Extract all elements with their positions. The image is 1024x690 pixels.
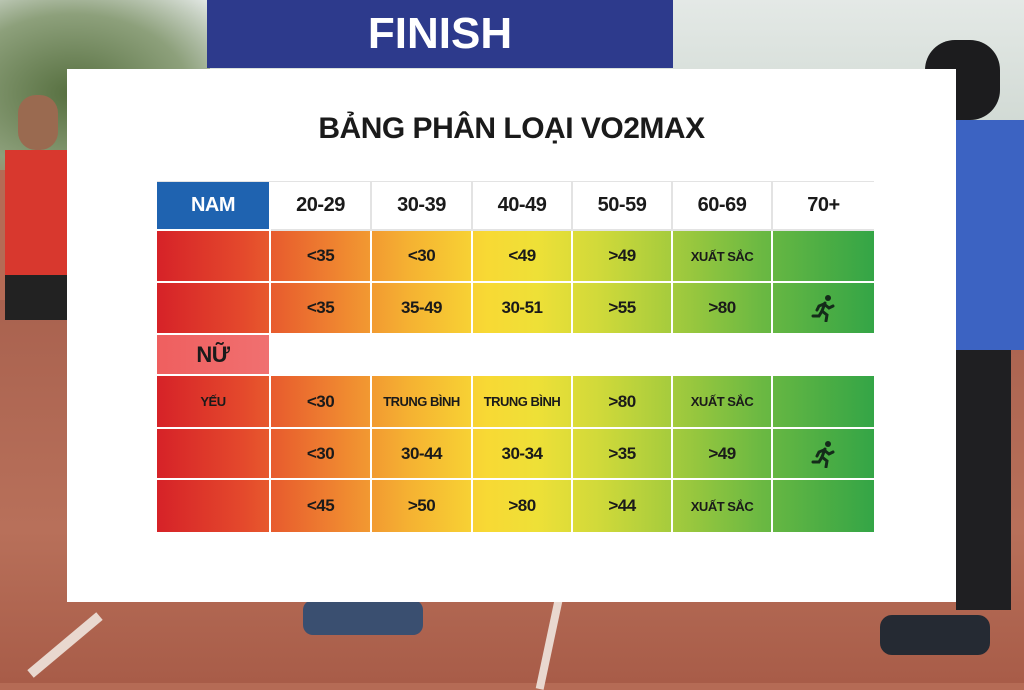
person right [956, 120, 1024, 350]
banner: finish: FINISH [368, 9, 512, 58]
header row: 30-39 [397, 194, 446, 216]
female header: NỮ [196, 342, 230, 366]
female row 3: >80 [508, 496, 536, 515]
male row 2: >55 [608, 298, 636, 317]
male row 1 [157, 231, 874, 283]
female row 2: >35 [608, 444, 636, 462]
female row 2 [157, 429, 874, 480]
female row 1: XUẤT SẮC [691, 394, 753, 409]
icon: runner [812, 295, 834, 322]
female row 3: >44 [608, 496, 636, 515]
male row 1: <35 [307, 246, 334, 265]
female row 1: >80 [608, 392, 636, 410]
runner left [5, 150, 67, 275]
female row 2: 30-34 [502, 444, 542, 462]
male row 1: <30 [408, 246, 435, 265]
male row 1: <49 [508, 246, 536, 265]
header row: 50-59 [598, 194, 646, 216]
male row 2 [157, 283, 874, 335]
female row 3: >50 [408, 496, 435, 515]
female row 3: XUẤT SẮC [691, 498, 753, 514]
female row 1: TRUNG BÌNH [383, 394, 460, 409]
female row 2: >49 [708, 444, 736, 462]
table [157, 181, 874, 532]
banner: finish [207, 0, 673, 68]
icon: runner 2 [812, 441, 834, 468]
female row 3 [157, 480, 874, 532]
female row 1: <30 [307, 392, 334, 410]
female row 1 [157, 376, 874, 429]
header row: NAM [191, 194, 235, 216]
male row 2: >80 [708, 298, 736, 317]
female row 2: <30 [307, 444, 334, 462]
female row 1: TRUNG BÌNH [484, 394, 560, 409]
male row 2: 35-49 [401, 298, 442, 317]
header row: 20-29 [296, 194, 345, 216]
title: BẢNG PHÂN LOẠI VO2MAX [318, 112, 705, 145]
panel: main white card [67, 69, 956, 602]
male row 2: <35 [307, 298, 334, 317]
male row 2: 30-51 [502, 298, 542, 317]
female row 2: 30-44 [401, 444, 442, 462]
header row: 40-49 [498, 194, 546, 216]
male row 1: XUẤT SẮC [691, 248, 753, 264]
female header [157, 335, 874, 376]
female row 3: <45 [307, 496, 334, 515]
header row [157, 181, 874, 231]
header row: 70+ [807, 194, 840, 216]
male row 1: >49 [608, 246, 636, 265]
header row: 60-69 [698, 194, 746, 216]
female row 1: YẾU [200, 394, 226, 409]
